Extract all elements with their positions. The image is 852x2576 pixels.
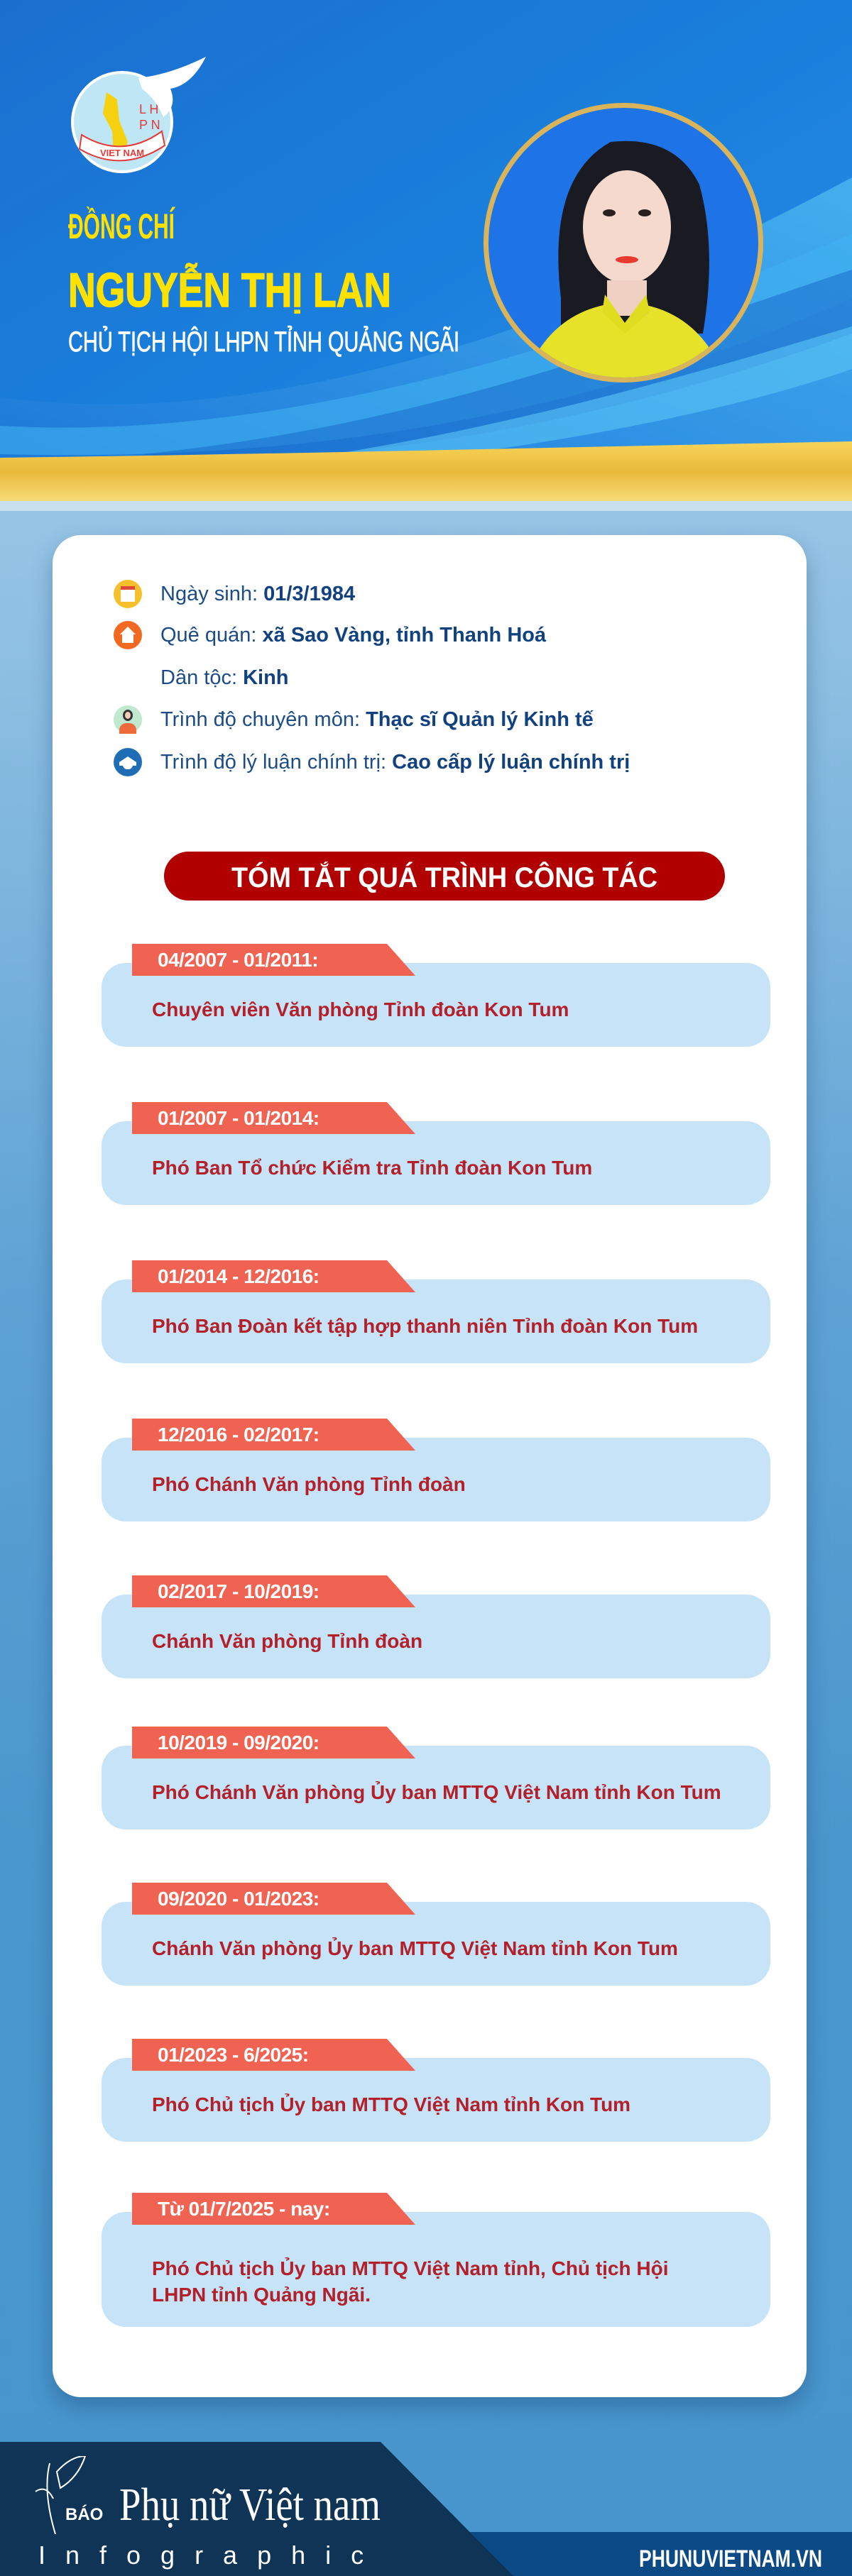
footer [0, 2442, 852, 2576]
footer logo: BÁO [65, 2504, 103, 2524]
header banner [0, 0, 852, 511]
timeline item 7: 09/2020 - 01/2023: [158, 1888, 320, 1910]
timeline item 2: 01/2007 - 01/2014: [158, 1107, 320, 1129]
timeline item 3: 01/2014 - 12/2016: [158, 1265, 320, 1287]
row: birth date: Ngày sinh: 01/3/1984 [160, 583, 355, 605]
timeline item 6: Phó Chánh Văn phòng Ủy ban MTTQ Việt Nam tỉnh Kon Tum [152, 1781, 721, 1803]
heading: career summary: TÓM TẮT QUÁ TRÌNH CÔNG TÁC [231, 861, 657, 893]
timeline item 8: Phó Chủ tịch Ủy ban MTTQ Việt Nam tỉnh Kon Tum [152, 2093, 630, 2115]
timeline item 9: Từ 01/7/2025 - nay: [158, 2198, 330, 2220]
row: political theory: Trình độ lý luận chính trị: Cao cấp lý luận chính trị [160, 751, 630, 774]
timeline item 5 [102, 1575, 770, 1678]
timeline item 3 [102, 1260, 770, 1363]
timeline item 7 [102, 1883, 770, 1986]
logo: VIET NAM [100, 148, 144, 158]
footer tagline: infographic: Infographic [38, 2541, 383, 2570]
timeline item 2 [102, 1102, 770, 1205]
photo [484, 103, 763, 382]
row: ethnicity: Dân tộc: Kinh [160, 666, 288, 689]
timeline item 5: 02/2017 - 10/2019: [158, 1580, 320, 1602]
logo: P N [139, 118, 160, 132]
timeline item 1: Chuyên viên Văn phòng Tỉnh đoàn Kon Tum [152, 998, 569, 1020]
timeline item 9 [102, 2193, 770, 2327]
logo: L H [139, 102, 158, 116]
timeline item 5: Chánh Văn phòng Tỉnh đoàn [152, 1630, 422, 1652]
timeline item 4 [102, 1419, 770, 1521]
timeline item 3: Phó Ban Đoàn kết tập hợp thanh niên Tỉnh đoàn Kon Tum [152, 1315, 698, 1337]
timeline item 4: Phó Chánh Văn phòng Tỉnh đoàn [152, 1473, 466, 1495]
icon: graduation cap [114, 748, 142, 776]
timeline item 1 [102, 944, 770, 1047]
icon: calendar [114, 580, 142, 608]
panel: personal info [114, 580, 630, 776]
timeline item 9: Phó Chủ tịch Ủy ban MTTQ Việt Nam tỉnh, Chủ tịch Hội [152, 2257, 668, 2279]
timeline item 6: 10/2019 - 09/2020: [158, 1732, 320, 1754]
gold band [0, 441, 852, 502]
timeline item 7: Chánh Văn phòng Ủy ban MTTQ Việt Nam tỉnh Kon Tum [152, 1937, 678, 1959]
logo [72, 57, 206, 172]
timeline item 1: 04/2007 - 01/2011: [158, 949, 318, 971]
heading: career summary [164, 852, 725, 901]
panel: main card [53, 535, 807, 2397]
timeline item 6 [102, 1727, 770, 1829]
footer logo [36, 2456, 381, 2534]
timeline item 2: Phó Ban Tổ chức Kiểm tra Tỉnh đoàn Kon Tum [152, 1157, 592, 1179]
timeline item 9: LHPN tỉnh Quảng Ngãi. [152, 2284, 371, 2306]
icon: house [114, 621, 142, 649]
row: hometown: Quê quán: xã Sao Vàng, tỉnh Thanh Hoá [160, 624, 546, 646]
timeline item 8 [102, 2039, 770, 2142]
timeline item 8: 01/2023 - 6/2025: [158, 2044, 309, 2066]
timeline item 4: 12/2016 - 02/2017: [158, 1424, 320, 1446]
row: qualification: Trình độ chuyên môn: Thạc sĩ Quản lý Kinh tế [160, 708, 594, 731]
icon: woman [114, 705, 142, 734]
